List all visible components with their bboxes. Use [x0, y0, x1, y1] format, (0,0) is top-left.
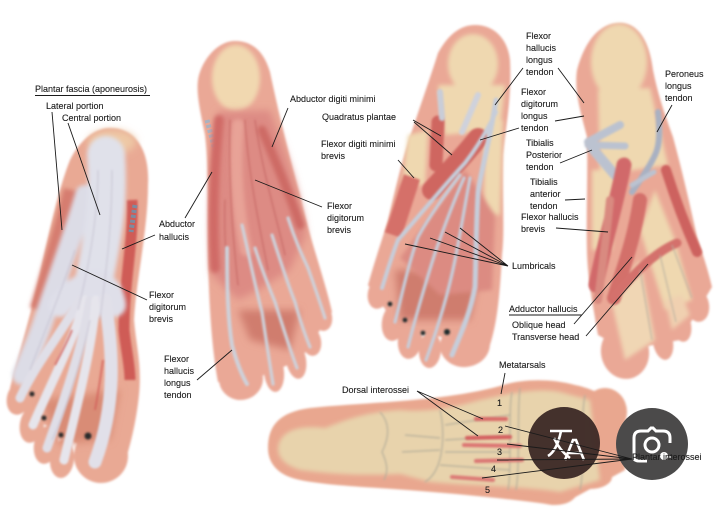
abductor tendon stripes	[131, 205, 135, 232]
foot 4: deep muscles and tendons	[576, 23, 712, 383]
label: flexor digitorum brevis, left foot: Flexor	[149, 290, 174, 300]
metatarsal numbers 1 to 5	[485, 398, 503, 495]
label: abductor hallucis: hallucis	[159, 232, 190, 242]
label: flexor hallucis longus tendon, second foot: tendon	[164, 390, 192, 400]
label: peroneus longus tendon: tendon	[665, 93, 693, 103]
label: flexor hallucis brevis: Flexor hallucis	[521, 212, 579, 222]
fascia slips to the toes	[20, 300, 111, 462]
foot 2 sole shading	[238, 310, 300, 350]
foot 3 digit muscle	[393, 177, 412, 235]
label: dorsal interossei: Dorsal interossei	[342, 385, 409, 395]
label: oblique head	[512, 257, 632, 330]
label: quadratus plantae	[322, 112, 452, 155]
foot 5 skin and toes	[268, 380, 630, 505]
label: tibialis anterior tendon: Tibialis	[530, 177, 558, 187]
label: peroneus longus tendon: Peroneus	[665, 69, 704, 79]
label: lateral portion	[46, 101, 104, 230]
label: tibialis posterior tendon: Tibialis	[526, 138, 554, 148]
foot 2 tendons	[227, 218, 325, 384]
label: tibialis posterior tendon	[526, 138, 592, 172]
label: abductor digiti minimi	[272, 94, 376, 147]
label: abductor hallucis: Abductor	[159, 219, 195, 229]
label: lumbricals	[405, 228, 556, 271]
label: flexor digitorum brevis, left foot	[72, 265, 186, 324]
foot 3 upper tendon fans	[440, 92, 478, 132]
label: flexor digiti minimi brevis: Flexor digiti minimi	[321, 139, 396, 149]
metatarsal numbers 1 to 5: 1	[497, 398, 502, 408]
toe shadows	[30, 392, 92, 440]
label: flexor digitorum brevis, left foot: brevis	[149, 314, 174, 324]
label: abductor digiti minimi: Abductor digiti minimi	[290, 94, 376, 104]
foot 2: flexor digitorum brevis	[198, 41, 335, 404]
foot 2 skin and toes	[198, 41, 335, 404]
label: transverse head: Transverse head	[512, 332, 579, 342]
label: tibialis posterior tendon: tendon	[526, 162, 554, 172]
foot 5: dorsal view, metatarsals and interossei	[268, 380, 630, 505]
foot 1 skin and toes	[3, 128, 148, 487]
metatarsal numbers 1 to 5: 5	[485, 485, 490, 495]
foot 5 joint lines	[380, 388, 585, 490]
label: flexor hallucis longus tendon, right feet: Flexor	[526, 31, 551, 41]
label: flexor hallucis brevis	[521, 212, 608, 234]
label: flexor digiti minimi brevis	[321, 139, 414, 178]
abductor hallucis muscle	[124, 200, 132, 380]
label: plantar interossei with leader lines: Plantar interossei	[632, 452, 702, 462]
fascia streaks	[30, 170, 112, 440]
label: tibialis anterior tendon: anterior	[530, 189, 561, 199]
foot 1: plantar fascia	[3, 128, 148, 487]
label: plantar fascia heading: Plantar fascia (aponeurosis)	[35, 84, 147, 94]
fascia bands	[22, 155, 114, 375]
foot 4 muscles	[596, 165, 697, 300]
foot 5 interossei	[452, 419, 522, 480]
label: flexor digitorum brevis, second foot	[255, 180, 364, 235]
foot 3 sole shading	[395, 270, 480, 320]
label: adductor hallucis heading: Adductor hallucis	[509, 304, 578, 314]
foot 3 bones	[402, 34, 505, 215]
label: tibialis anterior tendon: tendon	[530, 201, 558, 211]
label: metatarsals	[499, 360, 546, 394]
label: flexor hallucis longus tendon, right feet	[495, 31, 584, 105]
red gaps between fascia slips	[55, 330, 103, 410]
label: lumbricals: Lumbricals	[512, 261, 556, 271]
label: peroneus longus tendon	[657, 69, 704, 132]
foot 3 quadratus plantae	[432, 122, 478, 190]
heel highlight	[88, 130, 136, 154]
label: flexor hallucis longus tendon, second foot: longus	[164, 378, 191, 388]
label: flexor digitorum longus tendon	[480, 87, 584, 140]
label: flexor hallucis longus tendon, right feet: longus	[526, 55, 553, 65]
label: flexor digitorum longus tendon: longus	[521, 111, 548, 121]
label: flexor digitorum brevis, second foot: digitorum	[327, 213, 364, 223]
foot 3 toe shadows	[388, 302, 450, 335]
label: flexor digitorum longus tendon: tendon	[521, 123, 549, 133]
icon: translate button	[528, 407, 600, 479]
icon: camera search button	[616, 408, 688, 480]
foot 2 muscle fibres	[214, 120, 300, 290]
label: flexor digitorum brevis, second foot: brevis	[327, 225, 352, 235]
label: flexor digitorum brevis, left foot: digitorum	[149, 302, 186, 312]
label: flexor digitorum longus tendon: Flexor	[521, 87, 546, 97]
label: flexor hallucis longus tendon, right feet: tendon	[526, 67, 554, 77]
foot 3 tendons	[382, 100, 496, 360]
foot 4 tendons	[588, 112, 659, 192]
label: abductor hallucis	[122, 172, 212, 249]
label: tibialis posterior tendon: Posterior	[526, 150, 562, 160]
foot 3 skin and toes	[364, 25, 510, 370]
foot 4 skin and toes	[576, 23, 712, 383]
foot 4 bones	[591, 24, 692, 360]
label: transverse head	[512, 264, 648, 342]
label: peroneus longus tendon: longus	[665, 81, 692, 91]
label: dorsal interossei	[342, 385, 483, 436]
label: flexor hallucis brevis: brevis	[521, 224, 546, 234]
label: flexor hallucis longus tendon, second foot: Flexor	[164, 354, 189, 364]
foot 2 muscle mass	[211, 110, 306, 300]
label: flexor digitorum longus tendon: digitorum	[521, 99, 558, 109]
label: central portion	[62, 113, 121, 215]
foot 2 medial tendon stripes	[207, 120, 215, 150]
label: flexor hallucis longus tendon, right feet: hallucis	[526, 43, 557, 53]
label: flexor hallucis longus tendon, second foot	[164, 350, 232, 400]
label: central portion: Central portion	[62, 113, 121, 123]
label: oblique head: Oblique head	[512, 320, 566, 330]
foot 3: quadratus plantae and lumbricals	[364, 25, 510, 370]
label: metatarsals: Metatarsals	[499, 360, 546, 370]
label: flexor digiti minimi brevis: brevis	[321, 151, 346, 161]
foot 5 bones	[278, 390, 600, 492]
metatarsal numbers 1 to 5: 3	[497, 447, 502, 457]
foot 1 sole shading between toes	[40, 390, 120, 445]
label: flexor digitorum brevis, second foot: Flexor	[327, 201, 352, 211]
label: quadratus plantae: Quadratus plantae	[322, 112, 396, 122]
foot 3 muscle mass	[400, 170, 495, 295]
label: tibialis anterior tendon	[530, 177, 585, 211]
metatarsal numbers 1 to 5: 2	[498, 425, 503, 435]
lateral muscle shading	[38, 190, 72, 310]
label: plantar interossei with leader lines	[482, 426, 702, 478]
label: flexor hallucis longus tendon, second foot: hallucis	[164, 366, 195, 376]
metatarsal numbers 1 to 5: 4	[491, 464, 496, 474]
label: lateral portion: Lateral portion	[46, 101, 104, 111]
foot 4 phalanx lines	[640, 245, 692, 340]
foot 2 heel bone	[212, 45, 260, 111]
